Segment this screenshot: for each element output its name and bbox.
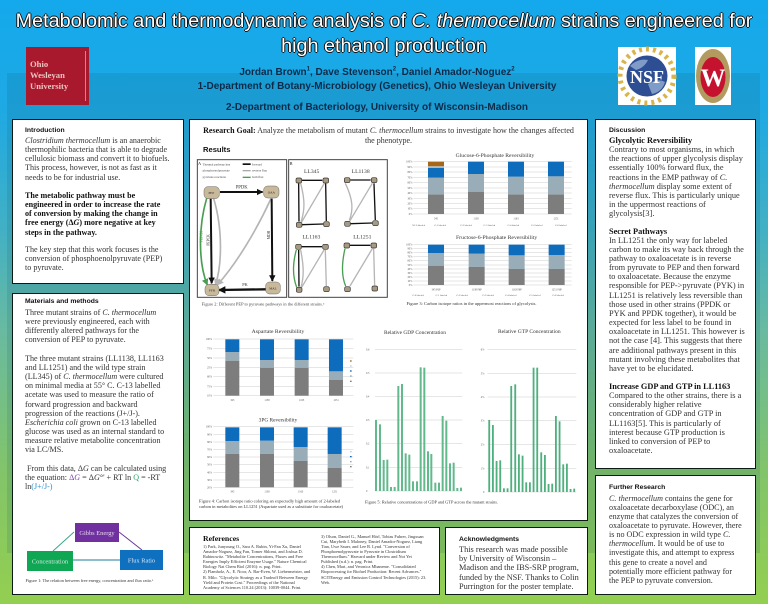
logo: NSF: NSF [630,67,664,87]
text: references column 2: Web. [321,580,330,585]
text: references column 2: Thermocellum." Harvard under Review and Not Yet [321,554,412,559]
panel A: pathway map: PYR [209,288,216,292]
chart: relative GTP concentration [481,330,576,494]
text: secret pathways: carbon to make its way back through the [609,245,744,254]
chart: glucose-6-phosphate reversibility: C-4 labeled [508,224,520,227]
chart: aspartate reversibility: 25% [207,366,213,369]
text: glycolytic reversibility [609,136,743,218]
chart: fructose-6-phosphate reversibility: C-1 labeled [436,294,448,297]
chart: 3PG reversibility: 345 [230,491,235,494]
text: introduction paragraph: thermophilic bacteria that is able to degrade [25,145,167,154]
chart: glucose-6-phosphate reversibility: 345 [434,217,439,220]
box: concentration: Concentration [32,558,69,566]
text: references column 1: Biology Nat Chem Biol (2016): n. pag. Print. [203,564,282,569]
title [16,10,753,57]
text: glycolytic reversibility: in the uppermost reactions of [609,200,706,209]
chart: 3PG reversibility: 90% [207,433,213,436]
chart: relative GTP concentration: 6% [481,349,485,352]
text: secret pathways: are additional pathways present in this [609,346,736,355]
heading: results: Results [203,145,230,154]
chart: glucose-6-phosphate reversibility: C-3 labeled [484,224,496,227]
chart: fructose-6-phosphate reversibility: 70% [407,256,413,259]
text: increase GDP and GTP: linked to conversion of PEP to [609,437,710,446]
text: secret pathways: mutant involving these metabolites that [609,355,740,364]
text: further research: is no ODC expression in wild type C. [609,530,730,539]
chart: fructose-6-phosphate reversibility: 40% [407,268,413,271]
text: acknowledgments: by University of Wisconsin – [459,554,556,563]
text: further research: the PEP to pyruvate conversion. [609,576,713,585]
panel A: pathway map: phosphoenolpyruvate [203,169,230,173]
text: references column 1: R. Milo. "Glycolytic Strategy as a Tradeoff Between Energy [203,575,308,580]
text: references column 1: Amador-Noguez, Jing Fan, Tomer Shlomi, and Joshua D. [203,549,303,554]
chart: glucose-6-phosphate reversibility: 90% [407,166,413,169]
text: methods: acetate was used to measure the ratio of [25,390,154,399]
chart: fructose-6-phosphate reversibility: 80% [407,252,413,255]
text: further research [609,494,742,585]
text: glycolytic reversibility: Contrary to most organisms, in which [609,145,734,154]
text: further research: investigate this, and attempt to express [609,548,734,557]
chart: relative GDP concentration: 0.5 [366,372,370,375]
chart: glucose-6-phosphate reversibility: 40% [407,192,413,195]
chart: glucose-6-phosphate reversibility: 70% [407,176,413,179]
logo: Ohio Wesleyan University [26,47,89,105]
text: references column 1: 1) Park, Junyoung O., Sara A. Rubin, Yi-Fan Xu, Daniel [203,544,301,549]
text: further research: enzyme that catalyzes the conversion of [609,512,738,521]
text: secret pathways: from pyruvate to PEP and then forward [609,263,740,272]
text: further research: oxaloacetate decarboxylase (ODC), an [609,503,734,512]
text: secret pathways: PYK and PPDK together), it would be [609,309,736,318]
chart: relative GTP concentration: 5% [481,372,485,375]
text: references column 1: Rabinowitz. "Metabolite Concentrations, Fluxes and Free [203,554,303,559]
chart: fructose-6-phosphate reversibility: 10% [407,280,413,283]
text: secret pathways: LL1251 is relatively less reversible than [609,291,742,300]
chart: glucose-6-phosphate reversibility: 100% [406,161,413,164]
chart: aspartate reversibility: 75% [207,385,213,388]
text: further research: C. thermocellum contains the gene for [609,494,733,502]
panel: discussion [595,119,756,468]
chart: fructose-6-phosphate reversibility: C-5 labeled [529,294,541,297]
authors: Jordan Brown1, Dave Stevenson2, Daniel Amador-Noguez2 [239,67,515,78]
panel A: pathway map: pyruvate reactions [203,175,227,179]
chart: glucose-6-phosphate reversibility: 30% [407,197,413,200]
text: methods: and LL1251) and the wild type strain [25,363,145,372]
heading: acknowledgments: Acknowledgments [459,536,519,543]
chart: fructose-6-phosphate reversibility: 30% [407,272,413,275]
chart: 3PG reversibility: 1251 [332,491,338,494]
text: increase GDP and GTP: considerably higher relative [609,400,702,409]
text: glycolytic reversibility: glycolysis[3]. [609,209,654,218]
text: secret pathways [609,226,745,373]
text: references column 2: Published (n.d.): n. pag. Print. [321,559,373,564]
chart: glucose-6-phosphate reversibility: 80% [407,171,413,174]
text: secret pathways: to oxaloacetate. Because the enzyme [609,272,731,281]
chart: fructose-6-phosphate reversibility: 90% [407,248,413,251]
chart: aspartate reversibility: 50% [207,357,213,360]
panel B: strain pathway maps: LL1138 [352,169,370,175]
logo: Ohio Wesleyan University: Wesleyan [30,70,65,80]
text: bold statement: The metabolic pathway must be [25,191,135,200]
chart: 3PG reversibility: 1138 [264,491,270,494]
text: key step: The key step that this work focuses is the [25,245,159,254]
text: bold statement: engineered in order to increase the rate [25,200,160,209]
chart: aspartate reversibility: 75% [207,347,213,350]
title: Metabolomic and thermodynamic analysis of C. thermocellum strains engineered for [16,10,752,32]
chart: fructose-6-phosphate reversibility: 345 F6P [432,288,441,291]
text: methods: progression of the reactions (J+/J-). [25,409,140,418]
text: glycolytic reversibility: essentially 100% forward flux, the [609,163,724,172]
chart: aspartate reversibility: 1163 [299,399,305,402]
chart: glucose-6-phosphate reversibility: 1163 [513,217,519,220]
text: secret pathways: those used in other strains (PPDK or [609,300,730,309]
chart: aspartate reversibility: 60% [207,376,213,379]
chart: glucose-6-phosphate reversibility: C-1 labeled [434,224,447,227]
text: methods [24,308,166,491]
chart: fructose-6-phosphate reversibility: C-2 labeled [456,294,469,297]
text: methods: glucose was used as an internal standard to [25,427,164,436]
chart: fructose-6-phosphate reversibility: 100% [406,244,413,247]
text: acknowledgments: Purrington for the poster template. [459,582,574,591]
text: methods: differently altered pathways for the [25,326,139,335]
caption: figure 4: carbon in metabolites on LL1251 (Aspartate used as a substitute for oxaloacetate) [199,504,344,509]
text: references column 1: 2) Flamholz, A., E. Noor, A. Bar-Even, W. Liebermeister, and [203,569,310,574]
text: introduction paragraph: This process, however, is not as fast as it [25,163,157,172]
text: secret pathways: Secret Pathways [609,226,667,236]
text: references column 2: Cui, Marybeth I. Maloney, Daniel Amador-Noguez, Liang [321,539,422,544]
text: acknowledgments: Madison and the IBS-SRP program, [459,563,579,572]
text: references column 1: Yield and Protein Cost." Proceedings of the National [203,580,295,585]
chart: aspartate reversibility [206,330,353,402]
text: introduction paragraph: Clostridium thermocellum is an anaerobic [25,136,161,145]
text: references column 2: Phosphoenolpyruvate to Pyruvate in Clostridium [321,549,406,554]
logo: Ohio Wesleyan University: University [30,81,68,91]
chart: fructose-6-phosphate reversibility: 1163 F6P [512,288,522,291]
chart: relative GTP concentration: 4% [481,396,485,399]
heading: discussion: Discussion [609,127,645,134]
chart: relative GTP concentration: 2% [481,443,485,446]
text: glycolytic reversibility: reverse flux. This is particularly unique [609,191,740,200]
text: references column 2: 3) Olson, Daniel G., Manuel Hörl, Tobias Fuhrer, Jingxuan [321,534,424,539]
chart: fructose-6-phosphate reversibility: 60% [407,260,413,263]
panel B: strain pathway maps: LL1163 [302,235,320,241]
text: methods: on minimal media at 55° C. C-13 labelled [25,381,160,390]
text: increase GDP and GTP: interest because GTP production is [609,428,725,437]
chart: relative GDP concentration [366,331,462,493]
chart: glucose-6-phosphate reversibility: C-2 labeled [460,224,473,227]
logo: Ohio Wesleyan University: Ohio [30,59,48,69]
box: Gibbs energy: Gibbs Energy [79,530,115,537]
chart: relative GDP concentration: 0.1 [366,466,370,469]
heading: references: References [203,534,239,543]
text: bold statement [25,191,160,237]
text: key step: conversion of phosphoenolpyruvate (PEP) [25,254,162,263]
text: further research: potentially more efficient pathway for [609,567,732,576]
panel A: pathway map: reverse flux [252,169,267,173]
panel A: pathway map: MAL [269,286,277,290]
text: methods: measure relative metabolite concentration [25,436,161,445]
panel B: strain pathway maps: B [290,161,293,166]
affiliation 1: 1-Department of Botany-Microbiology (Genetics), Ohio Wesleyan University [198,81,556,92]
chart: glucose-6-phosphate reversibility: C-5 labeled [531,224,543,227]
chart: relative GDP concentration: 0.3 [366,419,370,422]
text: research goal [203,126,574,145]
panel: research goal and results [189,119,588,520]
text: references column 2: Bioprocessing for Biofuel Production: Recent Advances." [321,569,421,574]
chart: relative GDP concentration: 0.2 [366,442,370,445]
chart: relative GTP concentration: Relative GTP Concentration [498,330,561,335]
panel: references [189,527,440,595]
panel A: pathway map: PPDK [236,186,248,191]
text: secret pathways: In LL1251 the only way for labeled [609,236,727,245]
panel B: strain pathway maps: LL1251 [353,235,372,241]
text: key step [25,245,162,272]
panel A: pathway map: PEP [208,191,214,195]
chart: fructose-6-phosphate reversibility: C-6 labeled [552,294,565,297]
text: methods: ln(J+/J-) [25,482,52,491]
text: methods: were previously engineered, each with [25,317,150,326]
caption: figure 1: Figure 1: The relation between free energy, concentration and flux ratio.¹ [26,579,154,584]
figure 2: pathway diagrams [197,160,387,306]
chart: glucose-6-phosphate reversibility: Glucose-6-Phosphate Reversibility [456,154,535,159]
chart: fructose-6-phosphate reversibility: 50% [407,264,413,267]
chart: 3PG reversibility: 20% [207,486,213,489]
chart: fructose-6-phosphate reversibility: 20% [407,276,413,279]
caption: figure 2: Figure 2: Different PEP to pyruvate pathways in the different strains.³ [202,302,325,306]
chart: 3PG reversibility: 3PG Reversibility [259,419,298,424]
text: references column 2: SCITEnergy and Emission Control Technologies (2015): 23. [321,574,426,580]
text: references column 2 [321,534,426,585]
text: acknowledgments: funded by the NSF. Thanks to Colin [459,573,579,582]
text: increase GDP and GTP: oxaloacetate. [609,446,653,455]
chart: glucose-6-phosphate reversibility: 20% [407,203,413,206]
chart: relative GDP concentration: 0.6 [366,348,370,351]
text: introduction paragraph [25,136,170,182]
chart: glucose-6-phosphate reversibility: 10% [407,208,413,211]
chart: fructose-6-phosphate reversibility [406,236,572,297]
text: key step: to pyruvate. [25,263,64,272]
logo: NSF [618,47,676,105]
text: secret pathways: have yet to be elucidated. [609,364,694,373]
chart: aspartate reversibility: 100% [206,338,213,341]
chart: glucose-6-phosphate reversibility: 50% [407,187,413,190]
text: methods: Three mutant strains of C. thermocellum [25,308,156,317]
text: secret pathways: responsible for PEP->pyruvate (PYK) in [609,281,744,290]
chart: 3PG reversibility: 1163 [298,491,304,494]
text: methods: (LL345) of C. thermocellum were cultured [25,372,163,381]
text: methods: Escherichia coli grown on C-13 labelled [25,418,157,427]
text: glycolytic reversibility: Glycolytic Reversibility [609,136,692,145]
text: bold statement: of conversion by making the change in [25,209,158,218]
text: increase GDP and GTP: Compared to the other strains, there is a [609,391,741,400]
text: methods: via LC/MS. [25,445,63,454]
text: references column 1: Energies Imply Efficient Enzyme Usage." Nature Chemical [203,559,307,564]
affiliation 2: 2-Department of Bacteriology, University of Wisconsin-Madison [226,102,528,113]
chart: fructose-6-phosphate reversibility: C-3 labeled [482,294,495,297]
chart: relative GDP concentration: 0 [366,490,368,493]
chart: 3PG reversibility: 50% [207,464,213,467]
caption: figure 3: Figure 3: Carbon isotope ratios in the uppermost reactions of glycolysis. [406,302,537,306]
text: secret pathways: pathway to oxaloacetate is in reverse [609,254,731,263]
chart: fructose-6-phosphate reversibility: C-4 labeled [505,294,517,297]
chart: 3PG reversibility: 30% [207,479,213,482]
text: further research: oxaloacetate to pyruvate. However, there [609,521,742,530]
panel: further research [595,475,756,595]
chart: fructose-6-phosphate reversibility: 1251 F6P [552,288,562,291]
panel A: pathway map: forward [252,163,262,167]
chart: relative GDP concentration: 0.4 [366,396,370,399]
chart: 3PG reversibility: 100% [206,426,213,429]
text: methods: From this data, ΔG can be calculated using [27,464,166,473]
logo: Wisconsin crest [695,47,731,105]
chart: glucose-6-phosphate reversibility: 60% [407,182,413,185]
text: further research: this gene to create a novel and [609,558,707,567]
text: introduction paragraph: needs to be for industrial use. [25,173,120,182]
chart: glucose-6-phosphate reversibility: 0% [409,213,413,216]
text: increase GDP and GTP: Increase GDP and GTP in LL1163 [609,382,730,391]
text: methods: the equation: ΔG = ΔG°' + RT ln Q = -RT [25,473,160,482]
panel A: pathway map: PEPCK [200,231,204,242]
chart: relative GTP concentration: 1% [481,467,485,470]
text: bold statement: steps in the pathway. [25,228,97,237]
panel A: pathway map: MDH [267,230,271,239]
panel: materials and methods [12,293,184,595]
panel A: pathway map: PEPCK [206,234,210,246]
text: secret pathways: not the case [4]. This suggests that there [609,336,742,345]
chart: 3PG reversibility [206,419,353,494]
text: methods: conversion of PEP to pyruvate. [25,335,126,344]
caption: figure 5: Figure 5: Relative concentrations of GDP and GTP across the mutant strains. [365,500,498,504]
chart: aspartate reversibility: Aspartate Reversibility [252,330,305,335]
chart: fructose-6-phosphate reversibility: C-0 labeled [412,294,425,297]
text: introduction paragraph: cellulosic biomass and convert it to biofuels. [25,154,170,163]
heading: further research: Further Research [609,484,665,491]
text: methods: forward progression and backward [25,400,138,409]
text: references column 1: Academy of Sciences 110.24 (2013): 10039-0044. Print. [203,585,301,590]
chart: 3PG reversibility: 80% [207,441,213,444]
text: references column 2: Tian, Uwe Sauer, and Lee R. Lynd. "Conversion of [321,544,410,549]
chart: aspartate reversibility: 1251 [333,399,339,402]
text: increase GDP and GTP [609,382,742,455]
text: methods: The three mutant strains (LL1138, LL1163 [25,354,164,363]
chart: glucose-6-phosphate reversibility: 1138 [473,217,479,220]
box: flux ratio: Flux Ratio [128,558,155,564]
title: high ethanol production [281,35,487,57]
text: glycolytic reversibility: the reactions of upper glycolysis display [609,154,743,163]
heading: materials and methods: Materials and methods [25,298,99,305]
text: acknowledgments [459,545,579,591]
text: research goal: Research Goal: Analyze the metabolism of mutant C. thermocellum strains to investigate how the changes affected [203,126,574,135]
chart: relative GDP concentration: Relative GDP Concentration [384,331,447,336]
chart: 3PG reversibility: 70% [207,448,213,451]
chart: glucose-6-phosphate reversibility: M+0 labeled [412,224,426,227]
text: increase GDP and GTP: concentration of GDP and GTP in [609,409,722,418]
chart: glucose-6-phosphate reversibility: 1251 [553,217,559,220]
logo: Wisconsin crest: W [700,65,726,92]
text: secret pathways: expected for less label to be found in [609,318,731,327]
text: bold statement: free energy (ΔG) more negative at key [25,218,156,227]
chart: aspartate reversibility: 345 [230,399,235,402]
chart: aspartate reversibility: 10% [207,395,213,398]
chart: fructose-6-phosphate reversibility: 1138 F6P [472,288,482,291]
text: acknowledgments: This research was made possible [459,545,568,554]
panel A: pathway map: PK [242,282,249,287]
panel A: pathway map: Thermal pathway key [203,163,231,167]
chart: relative GTP concentration: 3% [481,420,485,423]
diagram: Gibbs energy triangle [27,523,163,571]
chart: glucose-6-phosphate reversibility [406,154,572,227]
chart: glucose-6-phosphate reversibility: C-6 labeled [555,224,567,227]
text: references column 1 [203,544,310,590]
panel A: pathway map: OAA [268,190,276,194]
text: glycolytic reversibility: reactions in the EMP pathway of C. [609,173,727,182]
text: secret pathways: oxaloacetate in LL1251. This however is [609,327,745,336]
chart: aspartate reversibility: 1138 [264,399,270,402]
chart: fructose-6-phosphate reversibility: Fructose-6-Phosphate Reversibility [456,236,538,241]
chart: 3PG reversibility: 60% [207,456,213,459]
heading: introduction: Introduction [25,127,65,134]
panel: acknowledgments [445,527,588,595]
caption: figure 4: Figure 4: Carbon isotope ratio coloring an expectedly high amount of 2-labeled [199,498,340,504]
text: increase GDP and GTP: LL1163[5]. This is particularly of [609,419,721,428]
text: research goal: the phenotype. [365,136,412,145]
text: references column 2: 4) Chen, Mari, and Veronica Mbaneme. "Consolidated [321,564,416,569]
text: further research: thermocellum. It would be of use to [609,539,724,548]
panel A: pathway map: both flux [252,175,264,179]
panel B: strain pathway maps [289,160,387,297]
panel: introduction [12,119,184,284]
panel A: pathway map: A [198,161,202,166]
chart: relative GTP concentration: 0 [483,491,485,494]
panel A: pathway map [197,160,287,297]
chart: fructose-6-phosphate reversibility: 0% [409,284,413,287]
text: glycolytic reversibility: thermocellum display some extent of [609,182,732,191]
panel B: strain pathway maps: LL345 [304,169,320,175]
chart: 3PG reversibility: 40% [207,471,213,474]
